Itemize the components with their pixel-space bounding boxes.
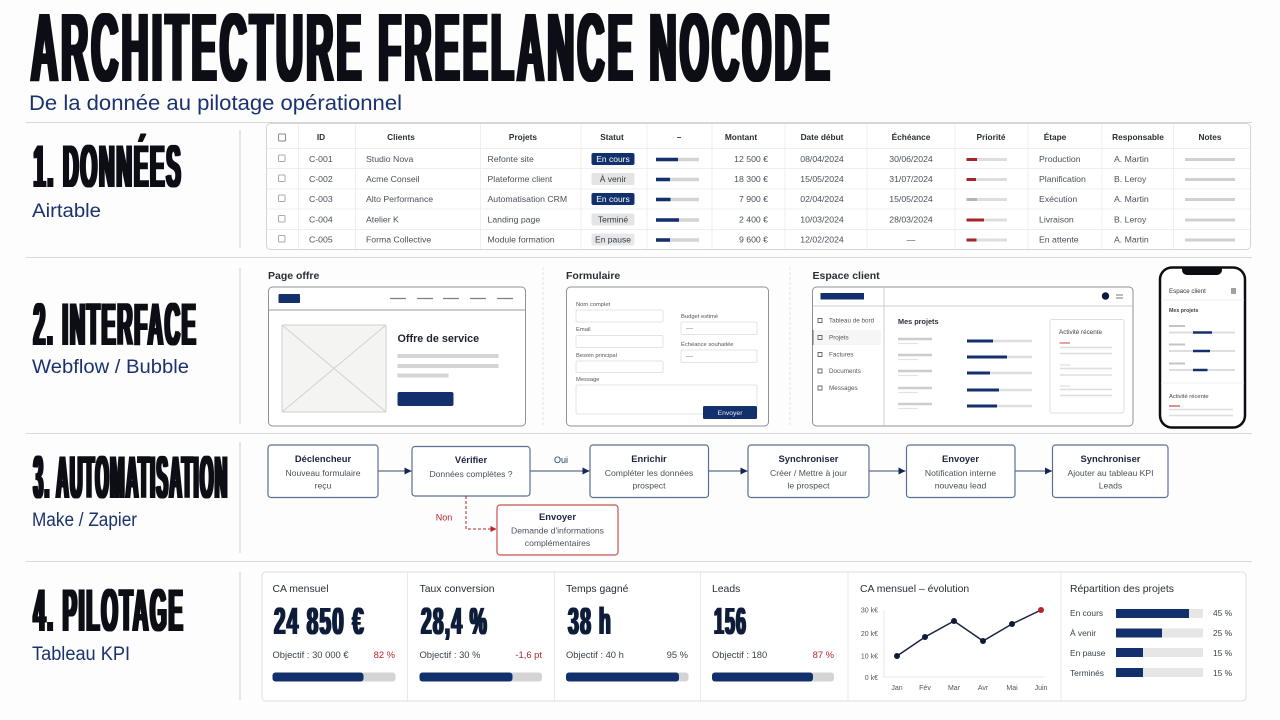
panel: data table: Montant	[725, 132, 757, 142]
panel: data table	[266, 124, 1250, 250]
line chart: CA mensuel évolution: Mar	[948, 685, 961, 692]
KPI: Temps gagné: Temps gagné	[566, 584, 629, 595]
section heading: 3. Automatisation: Make / Zapier	[32, 510, 138, 531]
bar chart: répartition des projets	[1070, 584, 1233, 678]
panel: data table: Atelier K	[366, 214, 399, 224]
panel: data table: 02/04/2024	[800, 194, 844, 204]
line chart: CA mensuel évolution: Mai	[1006, 685, 1018, 692]
text: 3. AUTOMATISATION	[34, 444, 229, 511]
panel: page offre	[268, 270, 526, 426]
panel: espace client desktop: Messages	[829, 385, 858, 392]
panel: data table: C-001	[309, 154, 333, 164]
bar chart: répartition des projets: Répartition des projets	[1070, 584, 1174, 595]
panel: data table: 12/02/2024	[800, 234, 844, 244]
arrow: non	[436, 496, 496, 529]
flow step: synchroniser prospect: Créer / Mettre à jour	[770, 468, 847, 478]
bar chart: répartition des projets: Terminés	[1070, 668, 1104, 678]
panel: data table: 15/05/2024	[800, 174, 844, 184]
section heading: 2. Interface	[32, 291, 198, 378]
status badges: En pause	[595, 234, 631, 244]
panel: data table: Statut	[600, 132, 624, 142]
panel: data table: A. Martin	[1114, 194, 1149, 204]
panel: data table: Date début	[801, 132, 844, 142]
flow step: enrichir: Compléter les données	[605, 468, 693, 478]
flow step: envoyer notification: Notification interne	[925, 468, 996, 478]
KPI: CA mensuel: 24 850 €	[274, 601, 365, 643]
section heading: 4. Pilotage: Tableau KPI	[32, 644, 130, 665]
panel: data table: ID	[317, 132, 325, 142]
panel: data table: En attente	[1039, 234, 1079, 244]
KPI: CA mensuel	[272, 584, 396, 682]
button: envoyer	[703, 406, 757, 419]
text: 1. DONNÉES	[34, 133, 182, 200]
panel: data table: Landing page	[488, 214, 540, 224]
section heading: 1. Données: Airtable	[32, 201, 101, 222]
KPI: Leads: Objectif : 180	[712, 649, 767, 660]
flow step: synchroniser prospect: Synchroniser	[779, 453, 839, 464]
flow step: envoyer notification: Envoyer	[942, 453, 979, 464]
flow step: envoyer notification	[906, 445, 1015, 498]
KPI: Taux conversion: -1,6 pt	[515, 649, 542, 660]
KPI: Leads	[712, 584, 834, 682]
card: activité récente	[1050, 320, 1124, 413]
line chart: CA mensuel évolution: 30 k€	[861, 608, 878, 614]
panel: formulaire: Email	[576, 327, 590, 333]
section heading: 3. Automatisation	[32, 444, 229, 531]
line chart: CA mensuel évolution: CA mensuel – évolution	[860, 584, 969, 595]
panel: data table: Acme Conseil	[366, 174, 420, 184]
KPI: Temps gagné: 95 %	[667, 649, 688, 660]
flow step: enrichir	[590, 445, 708, 498]
flow step: synchroniser KPI: Ajouter au tableau KPI	[1068, 468, 1154, 478]
flow step: envoyer demande	[497, 505, 618, 555]
flow step: envoyer demande: Envoyer	[539, 511, 576, 522]
line chart: CA mensuel évolution: 10 k€	[861, 654, 878, 660]
panel: data table: Refonte site	[488, 154, 534, 164]
KPI: Taux conversion	[420, 584, 542, 682]
status badges: À venir	[600, 174, 626, 184]
panel: data table: 10/03/2024	[800, 214, 844, 224]
text: 4. PILOTAGE	[34, 577, 184, 644]
panel: espace client desktop	[812, 270, 1133, 426]
panel: data table: Alto Performance	[366, 194, 433, 204]
flow step: déclencheur: Nouveau formulaire	[286, 468, 361, 478]
panel: espace client desktop: Espace client	[812, 270, 880, 282]
flow step: déclencheur	[268, 445, 378, 498]
KPI: Taux conversion: Objectif : 30 %	[420, 649, 480, 660]
bar chart: répartition des projets: À venir	[1070, 628, 1096, 638]
panel: data table: Module formation	[488, 234, 555, 244]
panel: data table: Échéance	[892, 132, 931, 142]
panel: espace client desktop: Mes projets	[898, 317, 939, 326]
panel: data table: C-002	[309, 174, 333, 184]
subtitle: De la donnée au pilotage opérationnel	[29, 91, 402, 115]
bar chart: répartition des projets: En pause	[1070, 648, 1106, 658]
panel: phone mockup: Espace client	[1169, 288, 1206, 295]
line chart: CA mensuel évolution: 20 k€	[861, 631, 878, 638]
button: envoyer: Envoyer	[718, 410, 743, 417]
KPI: CA mensuel: CA mensuel	[272, 584, 329, 595]
panel: data table: C-003	[309, 194, 333, 204]
panel: data table: A. Martin	[1114, 234, 1149, 244]
panel: data table: 12 500 €	[734, 154, 768, 164]
KPI: Leads: Leads	[712, 584, 740, 595]
panel: formulaire: Échéance souhaitée	[681, 341, 734, 348]
panel: formulaire: Budget estimé	[681, 314, 718, 320]
arrow: oui: Oui	[554, 455, 568, 465]
bar chart: répartition des projets: En cours	[1070, 608, 1103, 618]
arrow	[869, 470, 906, 472]
panel: espace client desktop: Factures	[829, 352, 854, 358]
panel: data table: 30/06/2024	[889, 154, 933, 164]
panel: formulaire: Message	[576, 377, 600, 383]
panel: espace client desktop: Projets	[829, 334, 849, 342]
panel: data table: Clients	[387, 132, 415, 142]
panel: data table: Notes	[1198, 132, 1222, 142]
panel: data table: Projets	[509, 132, 537, 142]
panel: data table: 28/03/2024	[889, 214, 933, 224]
KPI: CA mensuel: 82 %	[374, 649, 395, 660]
flow step: envoyer notification: nouveau lead	[935, 480, 987, 490]
line chart: CA mensuel évolution: Jan	[891, 685, 903, 692]
line chart: CA mensuel évolution: 0 k€	[865, 675, 878, 682]
panel: phone mockup: Mes projets	[1169, 308, 1198, 314]
panel: data table: 31/07/2024	[889, 174, 933, 184]
flow step: déclencheur: reçu	[315, 480, 332, 490]
flow step: vérifier: Données complètes ?	[429, 469, 513, 479]
arrow	[378, 470, 412, 472]
flow step: vérifier: Vérifier	[455, 454, 488, 465]
panel: data table: B. Leroy	[1114, 214, 1147, 224]
panel: data table: 9 600 €	[739, 234, 768, 244]
section heading: 4. Pilotage	[32, 577, 184, 665]
bar chart: répartition des projets: 45 %	[1213, 608, 1233, 618]
flow step: vérifier	[412, 446, 530, 496]
panel: data table: 7 900 €	[739, 194, 768, 204]
KPI: Leads: 87 %	[813, 649, 834, 660]
section heading: 2. Interface: Webflow / Bubble	[32, 357, 189, 378]
panel: data table: Responsable	[1112, 132, 1164, 142]
panel: data table: A. Martin	[1114, 154, 1149, 164]
flow step: envoyer demande: complémentaires	[525, 538, 590, 548]
panel: data table: 15/05/2024	[889, 194, 933, 204]
KPI: Temps gagné: Objectif : 40 h	[566, 649, 624, 660]
section heading: 1. Données	[32, 133, 182, 222]
flow step: synchroniser KPI: Leads	[1099, 480, 1122, 490]
panel: data table: Étape	[1044, 132, 1067, 142]
text: 2. INTERFACE	[34, 291, 198, 358]
panel: data table: Priorité	[976, 132, 1006, 142]
status badges: En cours	[596, 154, 630, 164]
panel: data table: Forma Collective	[366, 234, 431, 244]
KPI: Leads: 156	[714, 601, 747, 643]
arrow	[1015, 470, 1052, 472]
panel: data table: Plateforme client	[488, 174, 553, 184]
panel: formulaire: Nom complet	[576, 302, 611, 308]
panel: page offre: Offre de service	[398, 333, 479, 345]
KPI: CA mensuel: Objectif : 30 000 €	[272, 649, 349, 660]
flow step: synchroniser KPI	[1052, 445, 1168, 498]
status badges	[592, 153, 634, 246]
panel: data table: —	[907, 234, 916, 244]
line chart: CA mensuel évolution: Fév	[919, 685, 931, 692]
flow step: enrichir: prospect	[633, 480, 666, 490]
panel: data table: Studio Nova	[366, 154, 413, 164]
panel: formulaire	[566, 270, 768, 426]
panel: formulaire: Besoin principal	[576, 353, 617, 359]
panel: data table: B. Leroy	[1114, 174, 1147, 184]
status badges: En cours	[596, 194, 630, 204]
line chart: CA mensuel évolution: Avr	[978, 685, 989, 692]
bar chart: répartition des projets: 25 %	[1213, 628, 1233, 638]
status badges: Terminé	[598, 214, 628, 224]
flow step: synchroniser KPI: Synchroniser	[1081, 453, 1141, 464]
priority bars	[966, 160, 1007, 240]
bar chart: répartition des projets: 15 %	[1213, 668, 1233, 678]
progress bars	[656, 160, 699, 240]
KPI: Taux conversion: 28,4 %	[421, 601, 488, 643]
flow step: déclencheur: Déclencheur	[295, 453, 351, 464]
panel: page offre: Page offre	[268, 270, 320, 282]
KPI: Temps gagné: 38 h	[568, 601, 612, 643]
panel: data table: –	[677, 132, 682, 142]
notes placeholders	[1185, 160, 1235, 240]
panel: data table: Exécution	[1039, 194, 1077, 204]
panel: espace client desktop: Documents	[829, 368, 861, 375]
panel: phone mockup: Activité récente	[1169, 394, 1209, 400]
panel: data table: 2 400 €	[739, 214, 768, 224]
panel: phone mockup	[1160, 268, 1245, 428]
panel: data table: C-005	[309, 234, 333, 244]
panel: data table: 18 300 €	[734, 174, 768, 184]
KPI: Temps gagné	[566, 584, 688, 682]
panel: data table: Automatisation CRM	[488, 194, 567, 204]
panel: data table: Planification	[1039, 174, 1086, 184]
panel: data table: C-004	[309, 214, 333, 224]
panel: formulaire: Formulaire	[566, 270, 620, 282]
flow step: envoyer demande: Demande d'informations	[511, 526, 604, 536]
bar chart: répartition des projets: 15 %	[1213, 648, 1233, 658]
KPI: Taux conversion: Taux conversion	[420, 584, 495, 595]
arrow: oui	[530, 455, 590, 471]
card: activité récente: Activité récente	[1059, 329, 1103, 336]
arrow: non: Non	[436, 512, 452, 522]
panel: data table: Production	[1039, 154, 1081, 164]
line chart: CA mensuel évolution	[860, 584, 1048, 692]
panel: data table: Livraison	[1039, 214, 1074, 224]
panel: KPI dashboard	[262, 572, 1246, 701]
panel: espace client desktop: Tableau de bord	[829, 318, 875, 324]
line chart: CA mensuel évolution: Juin	[1035, 685, 1048, 692]
arrow	[708, 470, 748, 472]
image placeholder	[282, 325, 386, 412]
panel: data table: 08/04/2024	[800, 154, 844, 164]
flow step: enrichir: Enrichir	[631, 453, 667, 464]
flow step: synchroniser prospect	[748, 445, 869, 498]
flow step: synchroniser prospect: le prospect	[787, 480, 830, 490]
